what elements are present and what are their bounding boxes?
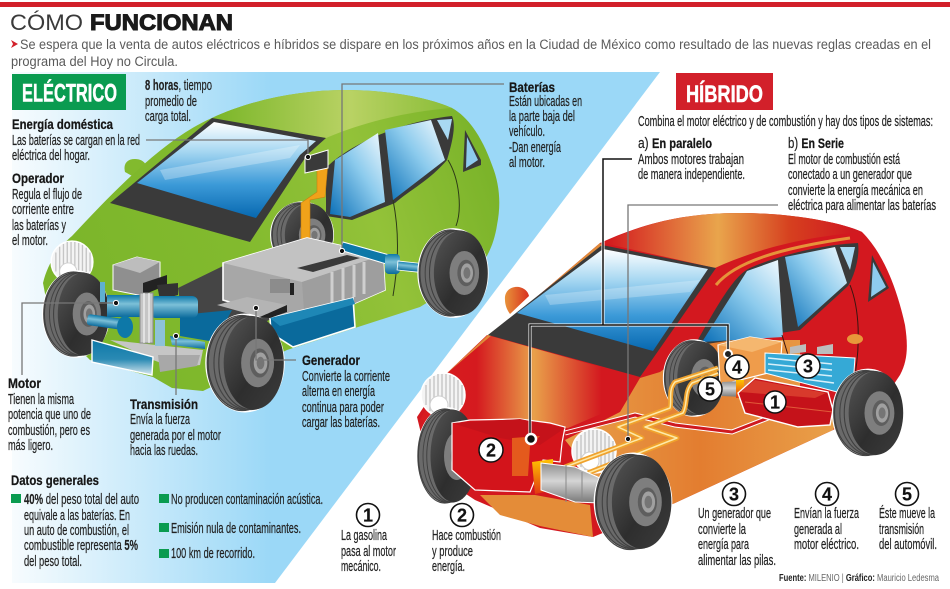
text: generador: alterna en energía [302,383,375,400]
electric car illustration [22,84,504,412]
wheel: front near [595,454,671,550]
intro text: programa del Hoy no Circula. [11,54,178,69]
marker 5 [698,377,722,401]
step 1: 1 [363,506,373,526]
text: motor [8,375,91,454]
title: CÓMO [10,10,83,35]
red car roof [603,213,862,268]
step 3: energía para [698,536,749,553]
step 1: La gasolina [341,527,387,544]
text: operador: Operador [12,170,64,186]
wheel: front near [206,314,284,412]
motor assembly [86,257,205,372]
hybrid car fans [421,373,616,473]
wheel: front left [43,271,109,357]
text: motor: Tienen la misma [8,391,74,408]
text: transmisión: Transmisión [130,396,198,412]
blue rear shaft [340,242,420,274]
box 1 red [738,378,833,427]
red wire [565,415,768,433]
title [10,10,233,35]
step 3: Un generador que [698,505,771,522]
text: generador: Generador [302,352,360,368]
door lines [393,160,459,296]
text: 8 horas: promedio de [145,93,197,110]
door line [782,285,858,375]
green windshield [110,118,326,242]
panel: datos generales: Emisión nula de contaminantes. [171,520,301,537]
step 1: mecánico. [341,558,381,575]
green side windows [326,116,481,220]
text: baterías [509,79,582,171]
panel: datos generales: Datos generales [11,472,99,488]
marker 4 [725,355,749,379]
yellow conduits [565,368,718,473]
heading: eléctrico [12,74,126,110]
text: operador: corriente entre [12,201,74,218]
step 2: Hace combustión [432,527,501,544]
panel: datos generales: del peso total. [24,553,82,570]
top red rule [0,2,950,7]
orange bumper [480,495,593,537]
marker 4: 4 [732,358,742,378]
text: operador: Regula el flujo de [12,186,82,203]
text: generador: cargar las baterías. [302,414,380,431]
marker 1 [764,391,786,413]
big grey battery block [223,238,385,325]
heading: híbrido [676,73,773,110]
text: motor: potencia que uno de [8,406,91,423]
wheel: front left [417,408,477,504]
wheel: rear near [833,370,903,456]
green car mirror [124,159,146,177]
text: energía doméstica: Energía doméstica [12,116,113,132]
orange box [718,337,782,385]
blue battery [270,298,355,347]
marker 2 [479,438,503,462]
text: baterías: Están ubicadas en [509,93,582,110]
marker 2: 2 [486,440,496,460]
step 5 [879,482,937,553]
text: en paralelo: de manera independiente. [638,166,745,183]
wheel: rear right [418,229,488,317]
dark blue coupling [180,310,232,342]
panel: datos generales: equivale a las baterías. En [24,507,130,524]
panel: datos generales [11,472,323,570]
panel: datos generales: 40% del peso total del auto [24,491,139,508]
panel: datos generales: No producen contaminación acústica. [171,491,323,508]
panel: datos generales: un auto de combustión, el [24,522,129,539]
marker 3 [796,354,820,378]
step 2: 2 [457,506,467,526]
marker 3: 3 [803,356,813,376]
text: operador [12,170,82,249]
step 5: 5 [902,484,912,504]
text: transmisión: Envía la fuerza [130,411,190,428]
charger and cable [301,150,328,240]
heading: híbrido: HÍBRIDO [686,80,763,108]
red car body [417,213,907,537]
orange floor [565,340,838,530]
title: FUNCIONAN [90,10,233,35]
step 4: 4 [822,484,832,504]
panel: datos generales: 100 km de recorrido. [171,545,255,562]
green car roof [212,90,452,138]
text: en serie [788,135,936,214]
panel: datos generales: combustible representa 5% [24,537,138,554]
text: baterías: -Dan energía [509,139,561,156]
heading: eléctrico: ELÉCTRICO [22,78,117,108]
text: baterías: Baterías [509,79,555,95]
red hood [420,335,640,428]
step 1: pasa al motor [341,543,396,560]
marker 1: 1 [770,392,780,412]
text: 8 horas [145,77,212,125]
text: energía doméstica [12,116,140,164]
wheel: rear far [664,340,724,416]
step 1 [341,504,396,575]
leader lines hybrid [526,159,778,444]
text: en paralelo: a) En paralelo [638,135,712,152]
door handle [847,334,863,344]
step 3: alimentar las pilas. [698,552,776,569]
text: baterías: al motor. [509,154,545,171]
roof-edge stripe [716,238,850,285]
step 4: motor eléctrico. [794,536,859,553]
text: transmisión: hacia las ruedas. [130,442,198,459]
text: motor: Motor [8,375,41,391]
step 2: y produce [432,543,473,560]
leader lines electric [22,84,504,395]
marker 5: 5 [705,380,715,400]
step 3 [698,482,776,569]
text: generador: Convierte la corriente [302,368,390,385]
green car body [43,90,499,391]
grey generator box [217,297,287,318]
text: baterías: la parte baja del [509,108,575,125]
step 4: generada al [794,521,842,538]
red windshield [488,245,716,377]
step 2: energía. [432,558,465,575]
text: generador: continua para poder [302,399,384,416]
text: operador: el motor. [12,232,48,249]
engine 2 red [452,419,565,492]
step 4: Envían la fuerza [794,505,859,522]
red side windows [695,243,889,345]
silver shaft rear [722,380,744,398]
text: baterías: vehículo. [509,123,545,140]
silver shaft front [532,459,600,503]
blue battery pack [765,344,855,392]
orange hood edge [445,243,603,375]
text: motor: más ligero. [8,437,53,454]
text: 8 horas: carga total. [145,108,191,125]
step 4 [794,482,859,553]
wheel: rear far [271,202,333,268]
text: transmisión: generada por el motor [130,427,221,444]
text: operador: las baterías y [12,217,66,234]
text: energía doméstica: eléctrica del hogar. [12,147,90,164]
text: en paralelo [638,135,745,183]
text: 8 horas: 8 horas, tiempo [145,77,212,94]
step 2 [432,504,501,575]
text: energía doméstica: Las baterías se cargan en la red [12,132,140,149]
hybrid car illustration [417,159,907,550]
text: en serie: b) En Serie [788,135,844,152]
panel: electric background [12,72,660,583]
text: en paralelo: Ambos motores trabajan [638,151,744,168]
text: generador [302,352,390,431]
front blue plate [92,340,153,375]
chassis base [178,266,300,335]
step 3: 3 [729,484,739,504]
green car fan [51,241,93,283]
step 3: convierte la [698,521,746,538]
red car mirror [505,287,529,314]
intro text [11,37,931,69]
text: motor: combustión, pero es [8,422,90,439]
text: transmisión [130,396,221,459]
